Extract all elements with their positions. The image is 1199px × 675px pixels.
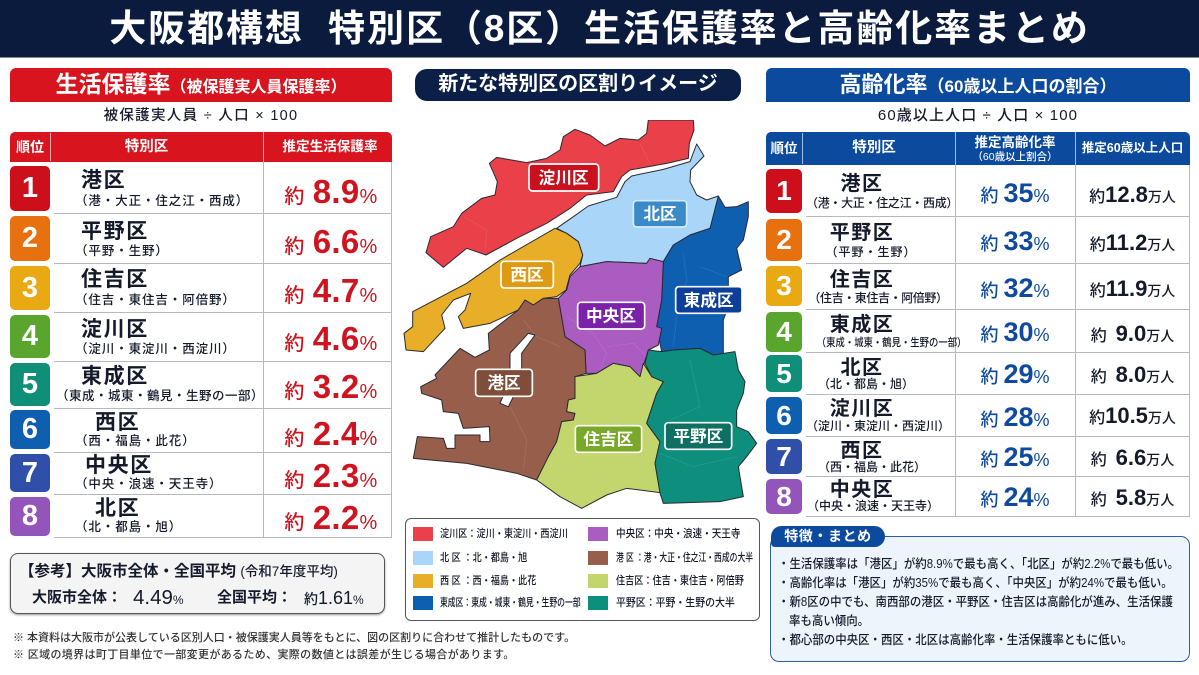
aging row 5 wards: （北・都島・旭）	[818, 377, 914, 391]
legend text Hirano: 平野区：平野・生野の大半	[616, 597, 735, 609]
aging row 6 population: 約10.5万人	[1089, 403, 1176, 428]
legend swatch Minato	[588, 551, 608, 565]
aging row 7 badge	[766, 439, 802, 474]
region: Kita	[557, 144, 718, 267]
row 6 wards: （西・福島・此花）	[75, 434, 196, 448]
row 1 wards: （港・大正・住之江・西成）	[75, 194, 249, 208]
aging row 4 wards: （東成・城東・鶴見・生野の一部）	[817, 337, 966, 349]
table header: welfare rate	[10, 132, 392, 162]
aging row 1 value: 約 35%	[980, 178, 1050, 208]
footnote 1: ※ 本資料は大阪市が公表している区別人口・被保護実人員等をもとに、図の区割りに合わせて推計したものです。	[13, 632, 575, 644]
aging row 2 population: 約11.2万人	[1090, 230, 1175, 255]
row 8 badge: 8	[22, 500, 38, 532]
label: Hirano	[665, 423, 732, 449]
table header: welfare rate: 特別区	[125, 139, 168, 155]
reference: Osaka city label: 大阪市全体：	[32, 589, 122, 606]
aging row 3 badge: 3	[776, 270, 792, 301]
row 6 badge	[10, 410, 50, 449]
row 1 badge: 1	[22, 172, 38, 204]
row 4 wards: （淀川・東淀川・西淀川）	[75, 342, 236, 356]
aging row 7 name: 西区	[840, 440, 884, 462]
aging row 6 badge	[766, 397, 802, 434]
row 6 value: 約2.4%	[284, 415, 378, 452]
table header: aging rate: 推定高齢化率	[974, 135, 1056, 150]
aging row 2 badge: 2	[776, 224, 792, 255]
label: Higashinari	[676, 287, 742, 313]
label: Nishi: 西区	[510, 266, 544, 285]
region: Minato	[413, 298, 586, 480]
row 5 badge: 5	[22, 368, 38, 400]
row 5 name: 東成区	[81, 365, 149, 388]
row 3 badge: 3	[22, 272, 38, 304]
aging row 1 wards: （港・大正・住之江・西成）	[806, 196, 958, 210]
panel: map legend	[405, 518, 760, 621]
aging row 1 name: 港区	[840, 173, 884, 195]
row 3 value: 約4.7%	[284, 272, 378, 309]
aging row 1 badge	[766, 169, 802, 213]
row 3 wards: （住吉・東住吉・阿倍野）	[75, 293, 236, 307]
label: Minato: 港区	[487, 374, 521, 393]
aging row 5 population: 約 8.0万人	[1091, 362, 1174, 387]
aging row 2 wards: （平野・生野）	[825, 245, 916, 259]
legend text Higashinari: 東成区：東成・城東・鶴見・生野の一部	[440, 597, 581, 609]
label: Kita: 北区	[643, 205, 677, 224]
label: Chuo: 中央区	[586, 306, 636, 326]
table header: welfare rate: 推定生活保護率	[282, 139, 378, 154]
aging row 4 name: 東成区	[830, 314, 894, 336]
row 3 name: 住吉区	[81, 268, 149, 291]
legend text Minato: 港 区 ：港・大正・住之江・西成の大半	[616, 552, 753, 564]
aging row 6 badge: 6	[776, 400, 792, 431]
panel: aging rate	[766, 68, 1190, 124]
aging row 2 name: 平野区	[830, 222, 894, 244]
aging row 7 population: 約 6.6万人	[1091, 445, 1174, 470]
table header: aging rate: 特別区	[852, 140, 896, 156]
aging row 1 population: 約12.8万人	[1089, 182, 1176, 207]
aging row 6 name: 淀川区	[830, 398, 894, 420]
row 2 badge	[10, 216, 50, 261]
aging row 4 badge: 4	[776, 316, 792, 347]
heading: welfare rate: 生活保護率（被保護実人員保護率）	[55, 71, 346, 97]
summary tab	[771, 526, 885, 547]
row 7 name: 中央区	[85, 454, 153, 477]
region: Nishi	[404, 228, 583, 352]
row 8 name: 北区	[95, 497, 140, 520]
aging row 3 value: 約 32%	[980, 273, 1050, 303]
label: Kita	[633, 201, 687, 227]
row 4 value: 約4.6%	[284, 320, 378, 357]
aging row 7 value: 約 25%	[980, 442, 1050, 472]
aging row 7 badge: 7	[776, 441, 792, 472]
legend swatch Nishi	[413, 574, 433, 588]
row 2 badge: 2	[22, 222, 38, 254]
label: Nishi	[501, 261, 553, 288]
aging row 2 value: 約 33%	[980, 226, 1050, 256]
row 8 value: 約2.2%	[284, 499, 378, 536]
aging row 4 value: 約 30%	[980, 317, 1050, 347]
row 4 badge: 4	[22, 320, 38, 352]
reference: national label: 全国平均：	[217, 589, 292, 606]
panel: reference averages	[10, 553, 385, 614]
aging row 6 wards: （淀川・東淀川・西淀川）	[806, 419, 950, 433]
panel: summary	[770, 536, 1190, 662]
legend swatch Higashinari	[413, 596, 433, 610]
reference heading: 【参考】大阪市全体・全国平均 (令和7年度平均)	[19, 563, 338, 580]
map heading: 新たな特別区の区割りイメージ	[438, 73, 718, 95]
legend swatch Hirano	[588, 596, 608, 610]
summary line 4: 率も高い傾向。	[789, 614, 869, 628]
row 2 wards: （平野・生野）	[75, 244, 169, 258]
row 8 badge	[10, 497, 50, 536]
row 4 name: 淀川区	[81, 318, 149, 341]
map heading	[415, 69, 741, 101]
aging row 8 wards: （中央・浪速・天王寺）	[807, 499, 939, 513]
inlet in Minato	[500, 333, 535, 407]
aging row 3 name: 住吉区	[830, 269, 894, 291]
heading: aging rate	[766, 68, 1190, 102]
summary tab: 特徴・まとめ	[784, 528, 872, 544]
legend text Sumiyoshi: 住吉区：住吉・東住吉・阿倍野	[616, 575, 744, 587]
summary line 5: ・都心部の中央区・西区・北区は高齢化率・生活保護率ともに低い。	[778, 633, 1133, 647]
table header: aging rate: 順位	[770, 141, 798, 156]
heading: welfare rate	[10, 68, 392, 102]
map: Osaka special wards	[404, 120, 758, 509]
table header: aging rate: （60歳以上割合）	[972, 151, 1058, 163]
aging row 5 name: 北区	[840, 357, 884, 379]
aging row 8 badge: 8	[776, 481, 792, 512]
heading: aging rate: 高齢化率（60歳以上人口の割合）	[840, 72, 1116, 97]
row 7 wards: （中央・浪速・天王寺）	[75, 477, 222, 491]
row 5 badge	[10, 363, 50, 406]
summary line 3: ・新8区の中でも、南西部の港区・平野区・住吉区は高齢化が進み、生活保護	[778, 595, 1173, 609]
legend swatch Yodogawa	[413, 527, 433, 541]
legend swatch Kita	[413, 551, 433, 565]
row 3 badge	[10, 266, 50, 310]
aging row 2 badge	[766, 219, 802, 261]
formula: aging rate: 60歳以上人口 ÷ 人口 × 100	[878, 107, 1078, 124]
formula: welfare rate: 被保護実人員 ÷ 人口 × 100	[104, 108, 298, 124]
legend swatch Sumiyoshi	[588, 574, 608, 588]
row 6 name: 西区	[95, 411, 140, 434]
row 5 wards: （東成・城東・鶴見・生野の一部）	[56, 389, 264, 403]
label: Hirano: 平野区	[673, 427, 724, 446]
row 5 value: 約3.2%	[284, 368, 378, 405]
row 1 value: 約8.9%	[284, 173, 378, 210]
row 7 badge: 7	[22, 457, 38, 489]
label: Chuo	[578, 302, 645, 329]
table header: aging rate	[766, 132, 1190, 165]
legend text Yodogawa: 淀川区：淀川・東淀川・西淀川	[440, 528, 568, 540]
aging row 4 population: 約 9.0万人	[1091, 321, 1174, 346]
region: Hirano	[645, 348, 757, 503]
row 7 value: 約2.3%	[284, 457, 378, 494]
aging row 8 name: 中央区	[830, 479, 894, 501]
aging row 5 badge	[766, 355, 802, 392]
row 2 name: 平野区	[81, 220, 149, 243]
legend text Nishi: 西 区 ：西・福島・此花	[440, 575, 536, 587]
aging row 6 value: 約 28%	[980, 402, 1050, 432]
aging row 3 population: 約11.9万人	[1090, 276, 1175, 301]
footnote 2: ※ 区域の境界は町丁目単位で一部変更があるため、実際の数値とは誤差が生じる場合があります。	[13, 649, 515, 661]
aging row 3 badge	[766, 266, 802, 306]
region: Sumiyoshi	[537, 363, 663, 508]
row 7 badge	[10, 454, 50, 492]
reference: national value: 約1.61%	[304, 588, 364, 608]
aging row 8 population: 約 5.8万人	[1091, 485, 1174, 510]
panel: welfare rate	[10, 68, 392, 124]
row 8 wards: （北・都島・旭）	[75, 520, 182, 534]
row 1 badge	[10, 166, 50, 211]
label: Yodogawa: 淀川区	[539, 168, 589, 187]
row 6 badge: 6	[22, 413, 38, 445]
reference: Osaka city value: 4.49%	[133, 586, 184, 609]
row 2 value: 約6.6%	[284, 223, 378, 260]
row 1 name: 港区	[81, 169, 126, 192]
region: Higashinari	[657, 196, 748, 355]
summary line 2: ・高齢化率は「港区」が約35%で最も高く、「中央区」が約24%で最も低い。	[778, 576, 1173, 590]
aging row 3 wards: （住吉・東住吉・阿倍野）	[808, 291, 948, 305]
legend swatch Chuo	[588, 527, 608, 541]
region: Yodogawa	[426, 120, 694, 267]
region: Chuo	[558, 258, 663, 377]
title	[0, 0, 1199, 58]
title: 大阪都構想 特別区（8区）生活保護率と高齢化率まとめ	[109, 8, 1090, 49]
row 4 badge	[10, 315, 50, 358]
legend text Chuo: 中央区：中央・浪速・天王寺	[616, 528, 740, 540]
aging row 8 badge	[766, 479, 802, 514]
label: Minato	[476, 369, 532, 396]
aging row 8 value: 約 24%	[980, 482, 1050, 512]
label: Higashinari: 東成区	[684, 290, 734, 310]
legend text Kita: 北 区 ：北・都島・旭	[440, 552, 527, 564]
aging row 4 badge	[766, 312, 802, 352]
label: Sumiyoshi: 住吉区	[583, 430, 634, 449]
aging row 1 badge: 1	[776, 175, 792, 206]
aging row 5 value: 約 29%	[980, 359, 1050, 389]
table header: aging rate: 推定60歳以上人口	[1082, 141, 1183, 155]
label: Sumiyoshi	[575, 426, 642, 452]
aging row 7 wards: （西・福島・此花）	[818, 460, 926, 474]
aging row 5 badge: 5	[776, 358, 792, 389]
table header: welfare rate: 順位	[16, 139, 44, 155]
summary line 1: ・生活保護率は「港区」が約8.9%で最も高く、「北区」が約2.2%で最も低い。	[778, 557, 1179, 571]
label: Yodogawa	[529, 164, 599, 191]
